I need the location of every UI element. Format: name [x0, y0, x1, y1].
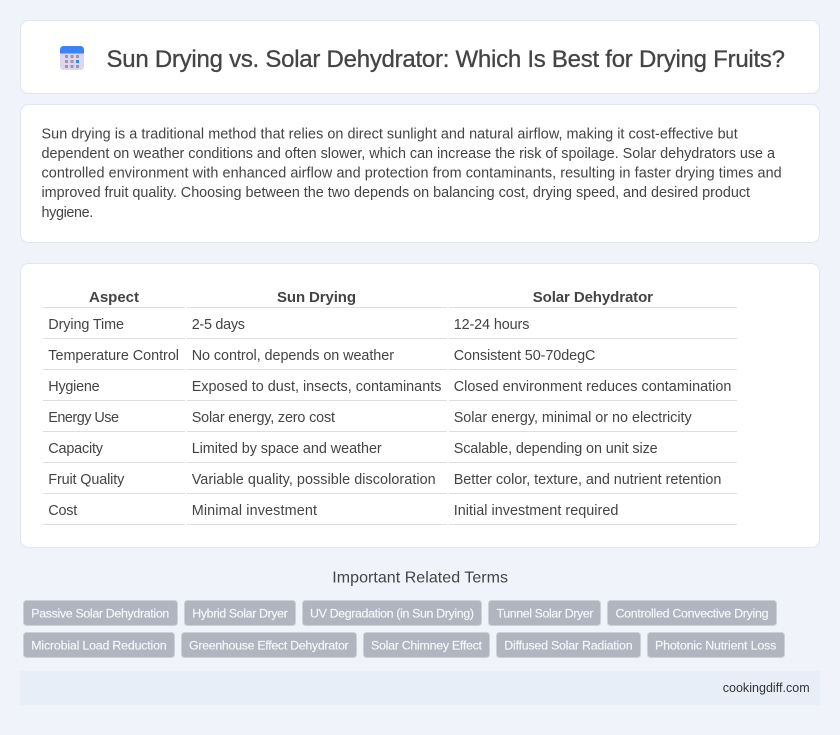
text block: introduction paragraph: dependent on weather conditions and often slower, which can increase the risk of spoilage. Solar dehydrators use a	[42, 146, 775, 162]
row: energy use: Solar energy, minimal or no electricity	[454, 410, 692, 426]
row: hygiene: Closed environment reduces contamination	[454, 379, 731, 395]
text block: introduction paragraph: improved fruit quality. Choosing between the two depends on balancing cost, drying speed, and desired product	[42, 185, 750, 201]
row: fruit quality: Fruit Quality	[48, 472, 125, 488]
row: temperature control	[48, 348, 595, 364]
title: Sun Drying vs. Solar Dehydrator: Which Is Best for Drying Fruits?	[106, 46, 785, 73]
tag: Hybrid Solar Dryer: Hybrid Solar Dryer	[192, 606, 288, 620]
row: drying time: 12-24 hours	[454, 317, 529, 333]
row: cost	[48, 503, 618, 519]
row: energy use	[48, 410, 692, 426]
table header: Sun Drying	[277, 289, 356, 306]
tag: Tunnel Solar Dryer: Tunnel Solar Dryer	[496, 606, 594, 620]
tag group: related terms	[24, 600, 784, 658]
icon: calendar	[60, 46, 84, 70]
row: hygiene: Hygiene	[48, 379, 100, 395]
row: capacity: Limited by space and weather	[192, 441, 382, 457]
tag: Controlled Convective Drying: Controlled Convective Drying	[616, 606, 769, 620]
row: capacity: Capacity	[48, 441, 104, 457]
tag: UV Degradation (in Sun Drying)	[302, 600, 482, 626]
row: fruit quality: Better color, texture, and nutrient retention	[454, 472, 721, 488]
tag: Controlled Convective Drying	[608, 600, 776, 626]
tag: Solar Chimney Effect: Solar Chimney Effect	[371, 638, 483, 652]
row: drying time	[48, 317, 529, 333]
row: hygiene: Exposed to dust, insects, contaminants	[192, 379, 441, 395]
tag: Hybrid Solar Dryer	[184, 600, 296, 626]
tag: Passive Solar Dehydration: Passive Solar Dehydration	[31, 606, 169, 620]
panel: title header	[20, 20, 820, 94]
tag: Microbial Load Reduction: Microbial Load Reduction	[31, 638, 167, 652]
text block: introduction paragraph: controlled environment with enhanced airflow and protection from contaminants, resulting in faster drying times and	[42, 166, 782, 182]
tag: Greenhouse Effect Dehydrator	[182, 632, 356, 658]
row: cost: Cost	[48, 503, 77, 519]
tag: Solar Chimney Effect	[364, 632, 490, 658]
tag: Microbial Load Reduction	[24, 632, 174, 658]
panel: introduction	[20, 104, 820, 242]
tag: Photonic Nutrient Loss: Photonic Nutrient Loss	[655, 638, 776, 652]
panel: comparison table	[20, 264, 820, 548]
tag: Photonic Nutrient Loss	[648, 632, 784, 658]
row: cost: Minimal investment	[192, 503, 317, 519]
text block: introduction paragraph: Sun drying is a traditional method that relies on direct sunlight and natural airflow, making it cost-effective but	[42, 126, 738, 142]
row: capacity	[48, 441, 658, 457]
row: capacity: Scalable, depending on unit size	[454, 441, 658, 457]
text block: introduction paragraph	[42, 126, 782, 221]
row: fruit quality	[48, 472, 721, 488]
row: cost: Initial investment required	[454, 503, 618, 519]
tag: Diffused Solar Radiation	[496, 632, 640, 658]
heading: important related terms: Important Related Terms	[332, 570, 508, 587]
row: temperature control: Temperature Control	[48, 348, 179, 364]
row: energy use: Energy Use	[48, 410, 119, 426]
row: drying time: 2-5 days	[192, 317, 245, 333]
table header	[89, 289, 653, 306]
tag: Passive Solar Dehydration	[24, 600, 178, 626]
tag: UV Degradation (in Sun Drying): UV Degradation (in Sun Drying)	[310, 606, 474, 620]
row: drying time: Drying Time	[48, 317, 124, 333]
table header: Solar Dehydrator	[533, 289, 653, 306]
tag: Greenhouse Effect Dehydrator: Greenhouse Effect Dehydrator	[189, 638, 349, 652]
footer source text: cookingdiff.com	[723, 681, 810, 695]
table row lines	[43, 307, 737, 525]
row: energy use: Solar energy, zero cost	[192, 410, 335, 426]
footer	[20, 671, 820, 705]
table header: Aspect	[89, 289, 139, 306]
row: temperature control: Consistent 50-70degC	[454, 348, 595, 364]
row: hygiene	[48, 379, 731, 395]
row: fruit quality: Variable quality, possible discoloration	[192, 472, 436, 488]
tag: Tunnel Solar Dryer	[488, 600, 600, 626]
text block: introduction paragraph: hygiene.	[42, 205, 93, 221]
tag: Diffused Solar Radiation: Diffused Solar Radiation	[504, 638, 633, 652]
row: temperature control: No control, depends on weather	[192, 348, 394, 364]
